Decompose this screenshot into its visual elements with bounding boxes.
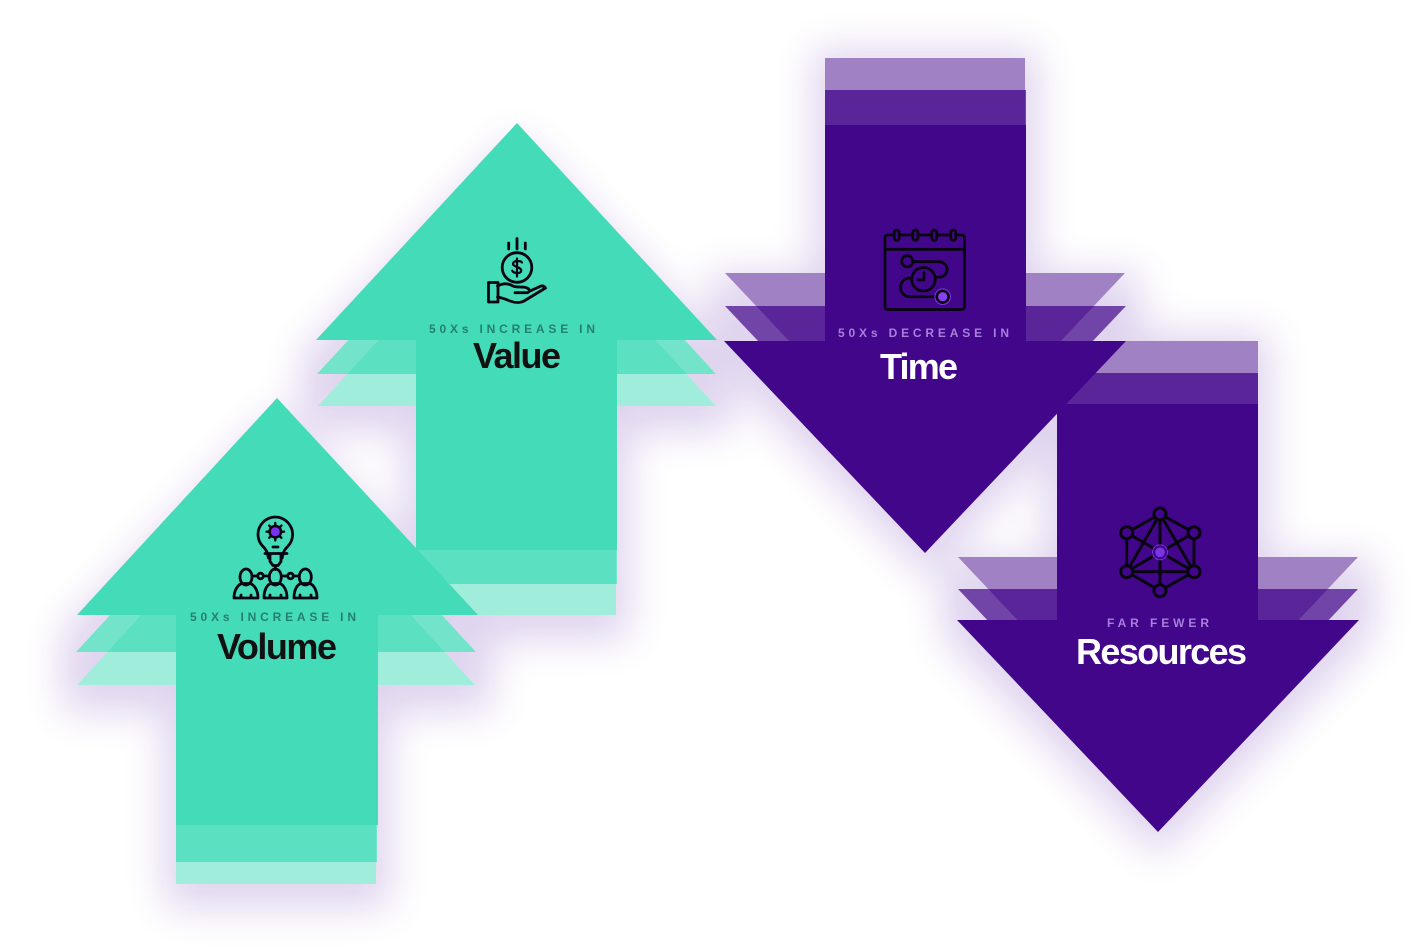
icon: calendar with clock [885, 230, 964, 310]
arrow: volume increase [76, 398, 478, 884]
icon: hand holding coin [488, 238, 546, 302]
label: far fewer: FAR FEWER [1107, 616, 1209, 630]
arrow: resources [957, 341, 1359, 832]
icon: network mesh [1121, 508, 1200, 597]
heading: value: Value [473, 335, 561, 376]
label: 50Xs decrease in: 50Xs DECREASE IN [838, 326, 1009, 340]
heading: resources: Resources [1076, 631, 1247, 672]
label: 50Xs increase in (value): 50Xs INCREASE IN [429, 322, 595, 336]
icon: lightbulb and team [234, 517, 317, 598]
arrow: time [724, 58, 1126, 553]
heading: time: Time [880, 346, 958, 387]
heading: volume: Volume [217, 626, 337, 667]
arrow: value increase [316, 123, 717, 615]
label: 50Xs increase in (volume): 50Xs INCREASE IN [190, 610, 356, 624]
